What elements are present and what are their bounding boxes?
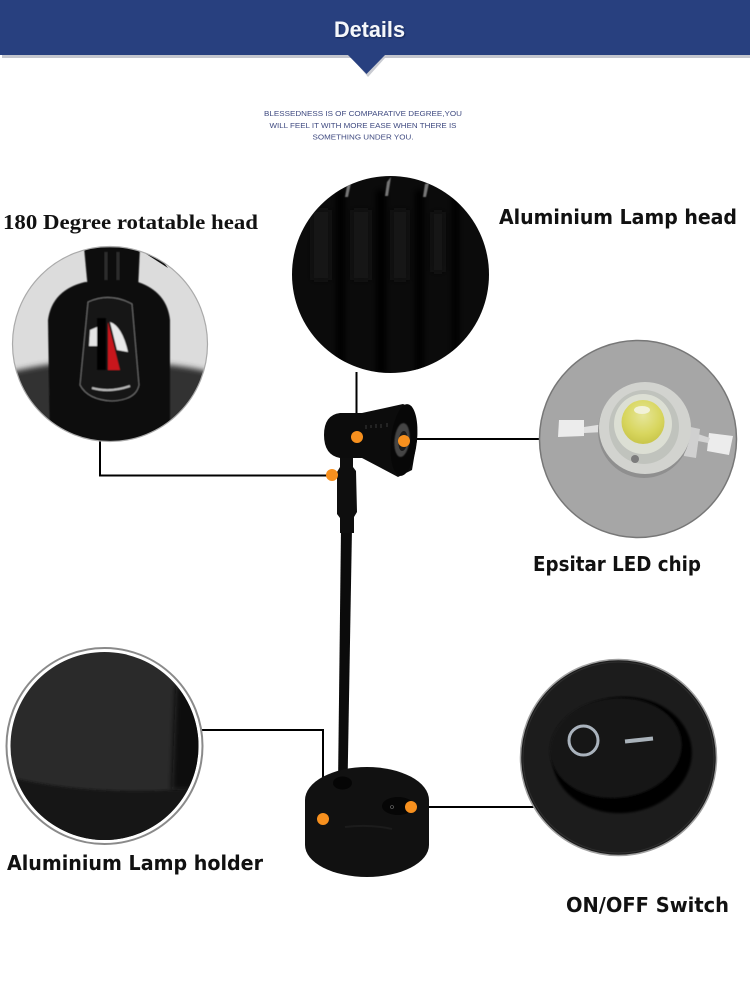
lamp product illustration xyxy=(305,403,429,877)
label: ON/OFF Switch: ON/OFF Switch xyxy=(566,893,729,917)
label: Epsitar LED chip: Epsitar LED chip xyxy=(533,552,701,576)
LED left lead xyxy=(558,420,584,437)
label: 180 Degree rotatable head: 180 Degree rotatable head xyxy=(3,210,258,234)
label: Aluminium Lamp head: Aluminium Lamp head xyxy=(499,205,737,229)
label: Aluminium Lamp holder: Aluminium Lamp holder xyxy=(7,851,263,875)
stem collar xyxy=(333,776,352,790)
header banner xyxy=(0,0,750,77)
lamp base xyxy=(305,767,429,877)
hotspot markers xyxy=(317,431,417,825)
lamp stem xyxy=(338,528,352,785)
tagline text: SOMETHING UNDER YOU. xyxy=(312,132,414,142)
LED package xyxy=(598,415,688,478)
detail circle: ON/OFF switch xyxy=(520,660,716,856)
tagline text: BLESSEDNESS IS OF COMPARATIVE DEGREE,YOU xyxy=(264,109,462,118)
rocker button xyxy=(546,690,698,820)
circle ring: rotatable head xyxy=(12,246,208,442)
tagline text: WILL FEEL IT WITH MORE EASE WHEN THERE IS xyxy=(270,121,456,130)
heading: Details: Details xyxy=(334,17,405,42)
on symbol xyxy=(625,738,653,742)
detail circle: lamp holder xyxy=(5,645,205,850)
off symbol xyxy=(569,726,598,755)
LED dome xyxy=(622,400,664,444)
lamp head xyxy=(324,403,421,477)
connector lines xyxy=(100,372,540,819)
small rocker switch xyxy=(382,797,414,815)
LED right lead xyxy=(707,433,733,455)
detail circle: rotatable head xyxy=(10,245,210,445)
detail circle: lamp head fins xyxy=(290,174,492,376)
lamp joint xyxy=(337,455,357,533)
tagline text xyxy=(264,109,462,142)
detail circle: LED chip xyxy=(540,340,736,538)
